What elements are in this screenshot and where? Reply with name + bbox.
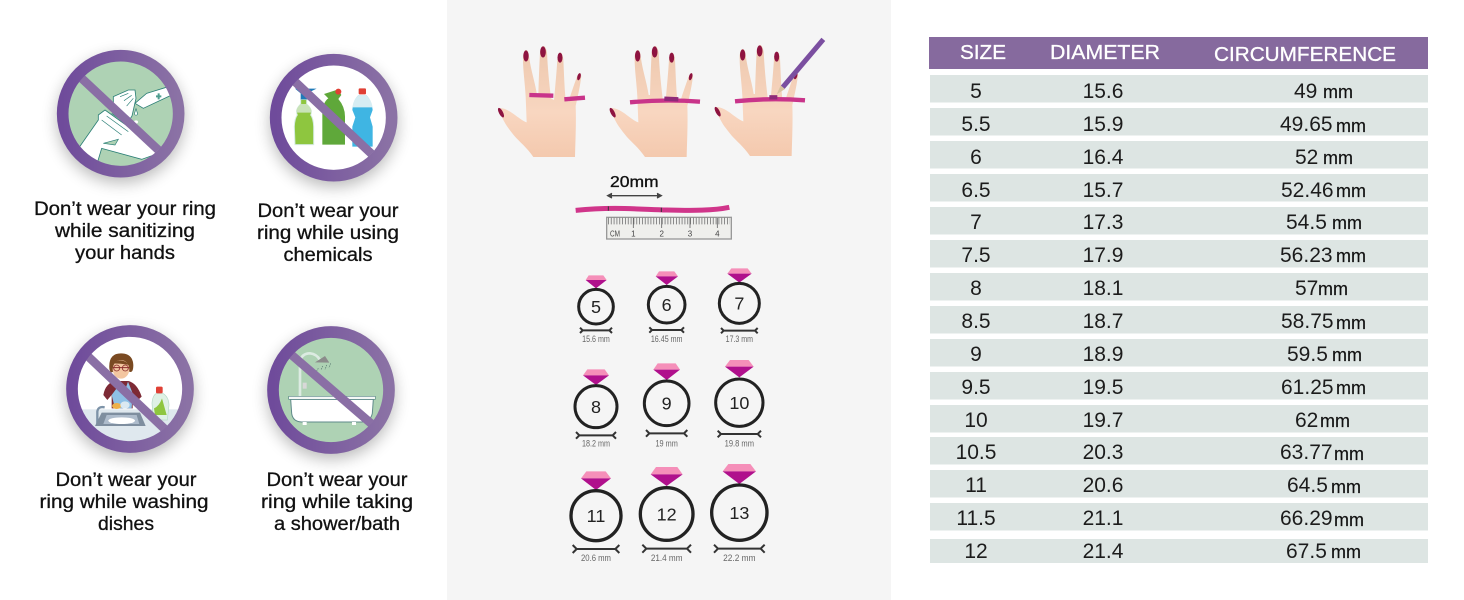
caption: washing dishes — [40, 470, 208, 535]
row: size 5: 5 — [970, 80, 982, 103]
caption: sanitizing: while sanitizing — [54, 221, 195, 242]
row: size 10.5 — [930, 437, 1428, 464]
row: size 7.5 — [930, 240, 1428, 268]
row: size 9: 18.9 — [1083, 343, 1123, 366]
row: size 7.5: 56.23 — [1280, 244, 1333, 267]
row: size 6.5: 15.7 — [1083, 179, 1123, 202]
ruler: 2 — [659, 229, 664, 238]
row: size 11.5: mm — [1334, 510, 1364, 530]
row: size 6.5 — [930, 174, 1428, 202]
warning: shower or bath — [261, 332, 413, 535]
ring: size 8: 18.2 mm — [582, 438, 610, 448]
row: size 9.5: 19.5 — [1083, 376, 1123, 399]
row: size 10.5: 63.77 — [1280, 441, 1333, 464]
row: size 5 — [930, 75, 1428, 103]
row: size 6.5: 52.46 — [1281, 179, 1334, 202]
row: size 6: 16.4 — [1083, 146, 1124, 169]
row: size 11: mm — [1331, 477, 1361, 497]
caption: shower or bath — [261, 470, 413, 535]
row: size 6: 52 — [1295, 146, 1318, 169]
measuring steps illustration — [497, 39, 823, 239]
row: size 11.5: 66.29 — [1280, 507, 1333, 530]
ring: size 6: 6 — [662, 295, 672, 315]
ring: size 13 — [712, 464, 767, 563]
ring: size 11: 11 — [587, 506, 605, 526]
caption: chemicals — [257, 201, 399, 266]
row: size 10.5: 10.5 — [956, 441, 996, 464]
caption: chemicals: chemicals — [284, 245, 372, 266]
ring: size 5 — [579, 275, 613, 344]
row: size 12: mm — [1331, 542, 1361, 562]
warning: washing dishes — [40, 331, 208, 535]
ring: size 7: 7 — [734, 294, 744, 314]
row: size 9.5: 9.5 — [961, 376, 991, 399]
row: size 5.5: 15.9 — [1083, 113, 1123, 136]
ring: size 8: 8 — [591, 397, 601, 417]
row: size 7.5: mm — [1336, 246, 1366, 266]
ring size chart — [571, 268, 767, 563]
row: size 11 — [930, 470, 1428, 498]
ruler — [607, 217, 731, 239]
ring: size 10 — [716, 360, 763, 448]
row: size 10 — [930, 405, 1428, 432]
row: size 8: 18.1 — [1083, 277, 1123, 300]
ring: size 9: 19 mm — [655, 438, 678, 448]
row: size 8.5: 58.75 — [1281, 310, 1334, 333]
ring: size 7 — [719, 268, 759, 344]
row: size 8: mm — [1318, 279, 1348, 299]
row: size 5: 49 — [1294, 80, 1317, 103]
row: size 11.5: 21.1 — [1083, 507, 1123, 530]
ruler: CM — [610, 229, 620, 238]
row: size 8.5: 8.5 — [961, 310, 991, 333]
ring: size 10: 19.8 mm — [725, 438, 754, 448]
paper strip — [576, 206, 729, 212]
ruler: 1 — [631, 229, 636, 238]
ring: size 12: 12 — [657, 504, 677, 524]
ring: size 9: 9 — [662, 394, 672, 414]
row: size 6: mm — [1323, 148, 1353, 168]
row: size 6.5: 6.5 — [961, 179, 991, 202]
ring: size 10: 10 — [729, 393, 749, 413]
row: size 11.5 — [930, 503, 1428, 530]
ring: size 8 — [575, 369, 617, 448]
ring: size 6: 16.45 mm — [651, 334, 682, 344]
row: size 7: 17.3 — [1083, 211, 1123, 234]
row: size 7.5: 17.9 — [1083, 244, 1123, 267]
row: size 12: 12 — [964, 540, 988, 563]
row: size 8.5: mm — [1336, 313, 1366, 333]
row: size 12 — [930, 539, 1428, 563]
ring: size 5: 15.6 mm — [582, 334, 610, 344]
row: size 7: 54.5 — [1286, 211, 1327, 234]
table header: CIRCUMFERENCE — [1214, 44, 1396, 66]
warning: chemicals — [257, 60, 399, 266]
table header — [929, 37, 1428, 69]
icon: no shower — [268, 332, 394, 459]
panel: size table — [929, 37, 1428, 563]
row: size 9 — [930, 339, 1428, 366]
row: size 7.5: 7.5 — [961, 244, 991, 267]
row: size 12: 67.5 — [1286, 540, 1327, 563]
row: size 11: 64.5 — [1287, 474, 1328, 497]
ruler: 4 — [715, 229, 720, 238]
ring: size 11: 20.6 mm — [581, 553, 611, 563]
row: size 5.5 — [930, 108, 1428, 136]
caption: washing dishes: dishes — [98, 514, 154, 535]
row: size 10: 19.7 — [1083, 409, 1123, 432]
arrow: 20mm span — [608, 193, 661, 198]
row: size 7: 7 — [970, 211, 982, 234]
row: size 10.5: 20.3 — [1083, 441, 1123, 464]
table header: SIZE — [960, 42, 1006, 64]
row: size 10: 62 — [1295, 409, 1318, 432]
ring: size 12: 21.4 mm — [651, 553, 682, 563]
row: size 8.5 — [930, 306, 1428, 334]
caption: sanitizing — [34, 199, 216, 264]
row: size 8.5: 18.7 — [1083, 310, 1123, 333]
caption: shower or bath: a shower/bath — [274, 514, 400, 535]
row: size 9.5: mm — [1336, 378, 1366, 398]
icon: no dish washing — [67, 331, 193, 458]
row: size 7: mm — [1332, 213, 1362, 233]
icon: no sanitizer — [57, 56, 184, 183]
row: size 9: mm — [1332, 345, 1362, 365]
row: size 8 — [930, 273, 1428, 300]
row: size 5.5: mm — [1336, 116, 1366, 136]
row: size 5.5: 5.5 — [961, 113, 991, 136]
label: 20mm: 20mm — [610, 174, 659, 191]
caption: chemicals: ring while using — [257, 223, 399, 244]
row: size 5: mm — [1323, 82, 1353, 102]
ring: size 13: 13 — [729, 503, 749, 523]
icon: no chemicals — [270, 60, 397, 187]
row: size 5.5: 49.65 — [1280, 113, 1333, 136]
ring: size 7: 17.3 mm — [726, 334, 753, 344]
row: size 6 — [930, 141, 1428, 169]
row: size 11: 20.6 — [1083, 474, 1123, 497]
row: size 11.5: 11.5 — [956, 507, 996, 530]
caption: shower or bath: Don’t wear your — [266, 470, 408, 491]
row: size 7 — [930, 207, 1428, 234]
row: size 9: 59.5 — [1287, 343, 1328, 366]
ring: size 11 — [571, 471, 621, 563]
ring: size 13: 22.2 mm — [723, 553, 755, 563]
caption: washing dishes: ring while washing — [40, 492, 208, 513]
ring: size 6 — [648, 271, 685, 344]
row: size 9: 9 — [970, 343, 982, 366]
row: size 9.5: 61.25 — [1281, 376, 1334, 399]
row: size 11: 11 — [965, 474, 987, 497]
caption: sanitizing: your hands — [75, 243, 175, 264]
hand: step 1 — [497, 46, 585, 157]
caption: washing dishes: Don’t wear your — [56, 470, 197, 491]
ruler: 3 — [688, 229, 693, 238]
caption: shower or bath: ring while taking — [261, 492, 413, 513]
warning: sanitizing hands — [34, 56, 216, 264]
hand: step 3 with pencil — [713, 39, 823, 156]
ring: size 5: 5 — [591, 297, 601, 317]
row: size 10: 10 — [964, 409, 988, 432]
row: size 10: mm — [1320, 411, 1350, 431]
ring: size 12 — [640, 467, 693, 563]
panel: how to measure — [447, 0, 891, 600]
row: size 6: 6 — [970, 146, 982, 169]
hand: step 2 — [608, 46, 700, 157]
row: size 10.5: mm — [1334, 444, 1364, 464]
panel: ring care warnings — [34, 56, 413, 535]
caption: chemicals: Don’t wear your — [258, 201, 399, 222]
row: size 8: 8 — [970, 277, 982, 300]
row: size 8: 57 — [1295, 277, 1318, 300]
caption: sanitizing: Don’t wear your ring — [34, 199, 216, 220]
ring: size 9 — [644, 363, 689, 448]
row: size 5: 15.6 — [1083, 80, 1123, 103]
row: size 6.5: mm — [1336, 181, 1366, 201]
table header: DIAMETER — [1050, 42, 1160, 64]
row: size 9.5 — [930, 372, 1428, 400]
row: size 12: 21.4 — [1083, 540, 1124, 563]
